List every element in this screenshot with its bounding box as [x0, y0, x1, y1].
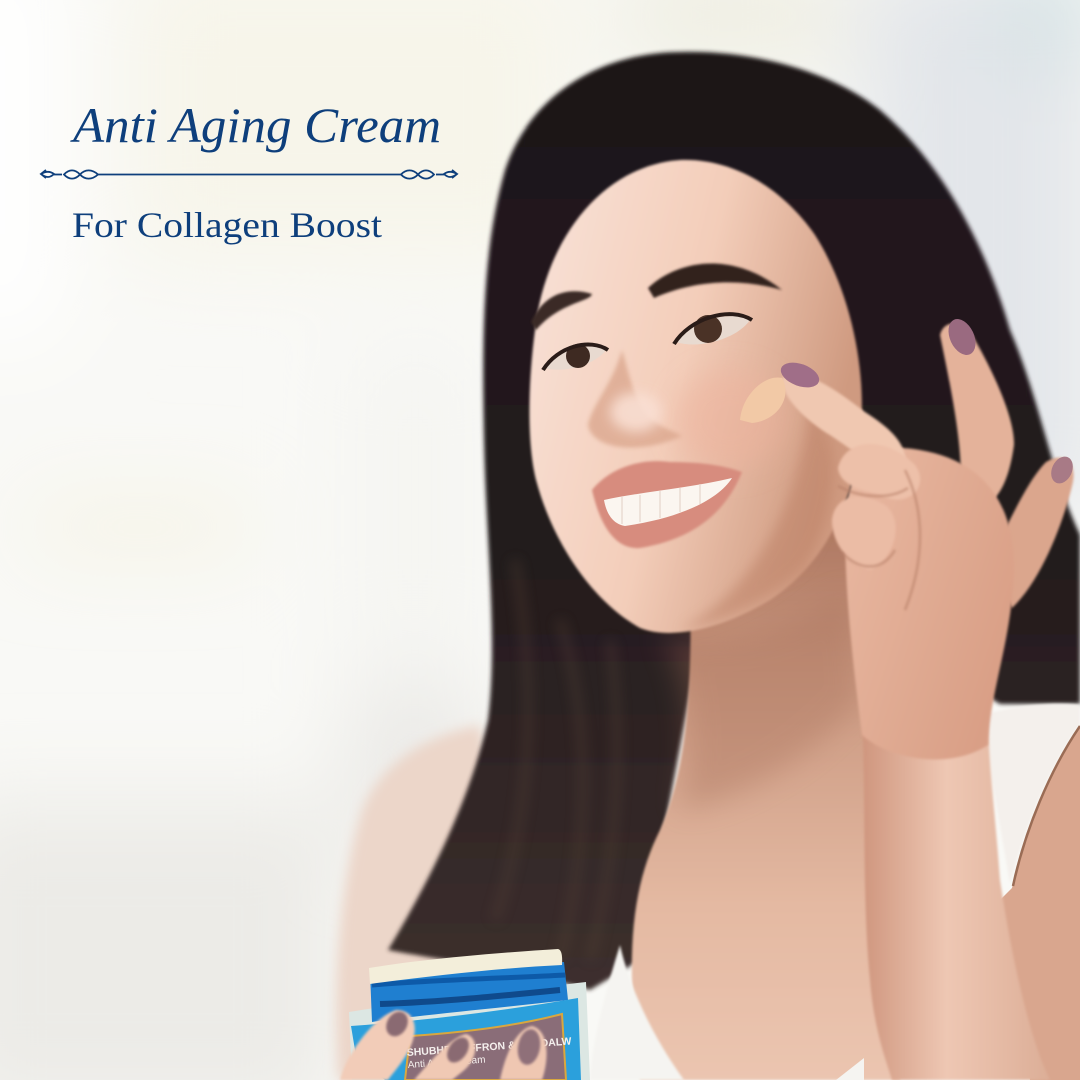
nail: outer — [1047, 453, 1077, 487]
knuckle creases — [838, 470, 920, 610]
cream dab — [740, 378, 785, 423]
finger: pinky raised — [940, 324, 1014, 506]
white tank top front — [590, 945, 684, 1080]
left eye — [543, 344, 608, 370]
left eyebrow — [531, 291, 592, 330]
product jar: Anti Aging Cream — [407, 1055, 486, 1071]
hand — [845, 448, 1014, 759]
right shoulder — [1000, 726, 1080, 1080]
neck shadow — [660, 590, 860, 810]
title: Anti Aging Cream — [70, 97, 441, 153]
cheek shadow — [680, 400, 833, 630]
finger: ring curled — [832, 497, 896, 570]
finger: middle curled — [838, 444, 920, 500]
forearm — [862, 710, 1050, 1080]
cheek blush — [675, 370, 785, 470]
nail: pinky — [943, 315, 981, 359]
strap edge — [1013, 726, 1080, 886]
product jar — [340, 949, 590, 1080]
ornamental divider — [41, 170, 457, 179]
jar lid — [369, 949, 562, 984]
nose tip — [610, 392, 662, 432]
left shoulder — [336, 725, 560, 1080]
subtitle: For Collagen Boost — [72, 205, 382, 245]
nose shadow — [588, 350, 682, 448]
label text: SHUBHR SAFFRON & SANDALW — [406, 1036, 572, 1059]
label inner mauve — [405, 1014, 566, 1080]
tooth gaps — [622, 484, 700, 524]
face — [529, 160, 862, 633]
finger: index — [782, 374, 906, 472]
jar neck blue — [370, 962, 568, 1022]
chest and neck — [632, 500, 900, 1080]
lips — [592, 461, 742, 548]
jar body glass — [349, 982, 590, 1080]
right eyebrow — [648, 263, 782, 298]
nails — [382, 1008, 412, 1040]
woman portrait illustration — [336, 52, 1080, 1080]
finger: little outer — [990, 458, 1074, 608]
hair — [388, 52, 1080, 990]
nail: index — [777, 358, 823, 392]
blue label — [351, 998, 581, 1080]
right eye — [674, 314, 752, 345]
teeth — [604, 478, 732, 526]
white tank top strap — [986, 704, 1080, 884]
holding fingers — [340, 1010, 415, 1080]
hair highlights — [495, 560, 617, 960]
